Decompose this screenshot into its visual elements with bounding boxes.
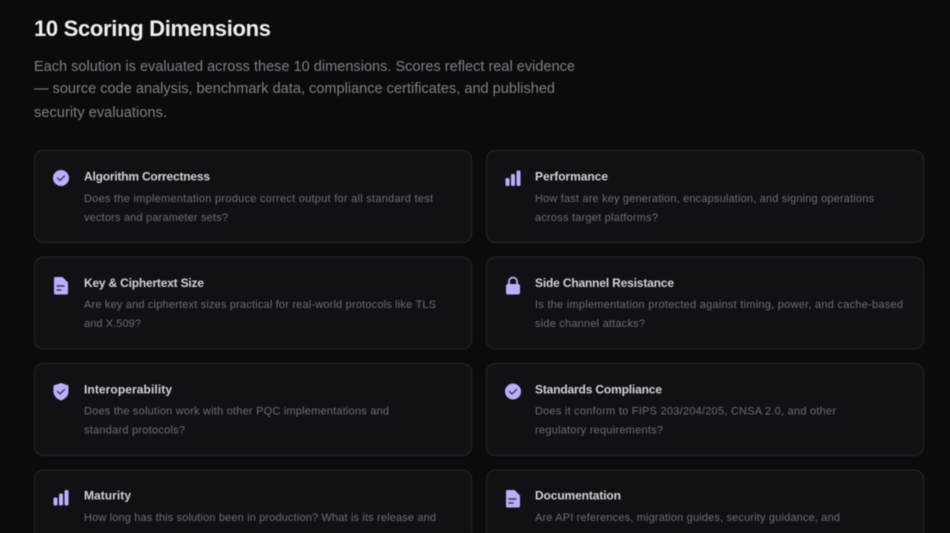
intro paragraph: Each solution is evaluated across these 10 dimensions. Scores reflect real evidence xyxy=(34,59,575,75)
icon: shield check xyxy=(54,383,68,400)
card text: Performance: Performance xyxy=(535,170,608,184)
icon: check badge xyxy=(53,170,69,186)
panel: Side Channel Resistance xyxy=(486,257,924,349)
card text: Algorithm Correctness: Does the implementation produce correct output for all standard test xyxy=(84,193,433,205)
panel: Key & Ciphertext Size xyxy=(34,257,472,349)
card text: Documentation: Documentation xyxy=(535,488,621,502)
card text: Algorithm Correctness: Algorithm Correctness xyxy=(84,170,210,184)
card text: Performance xyxy=(535,170,874,224)
card text: Maturity xyxy=(84,488,436,533)
icon: bars xyxy=(506,170,520,186)
card text: Interoperability: Interoperability xyxy=(84,382,172,396)
card text: Key & Ciphertext Size: Are key and ciphertext sizes practical for real-world protocols like TLS xyxy=(84,299,436,311)
card text: Side Channel Resistance: Side Channel Resistance xyxy=(535,276,674,290)
card text: Key & Ciphertext Size: and X.509? xyxy=(84,318,141,330)
card text: Side Channel Resistance: Is the implementation protected against timing, power, and cache-based xyxy=(535,299,903,311)
icon: lock xyxy=(506,278,520,294)
panel: Performance xyxy=(486,150,924,242)
title: 10 Scoring Dimensions xyxy=(34,16,271,41)
card text: Documentation: Are API references, migration guides, security guidance, and xyxy=(535,512,840,524)
card text: Side Channel Resistance: side channel attacks? xyxy=(535,318,645,330)
card text: Maturity: Maturity xyxy=(84,488,131,502)
panel: Maturity xyxy=(34,470,472,533)
card text: Performance: How fast are key generation, encapsulation, and signing operations xyxy=(535,193,874,205)
card text: Interoperability xyxy=(84,382,389,436)
card text: Interoperability: Does the solution work with other PQC implementations and xyxy=(84,406,389,418)
icon: document xyxy=(506,490,520,508)
intro paragraph: — source code analysis, benchmark data, compliance certificates, and published xyxy=(34,81,555,97)
card text: Performance: across target platforms? xyxy=(535,212,658,224)
intro paragraph xyxy=(34,59,575,121)
card text: Algorithm Correctness xyxy=(84,170,433,224)
panel: Interoperability xyxy=(34,364,472,456)
card text: Interoperability: standard protocols? xyxy=(84,424,185,436)
card text: Key & Ciphertext Size xyxy=(84,276,436,330)
card text: Standards Compliance xyxy=(535,382,836,436)
icon: check badge xyxy=(505,384,521,400)
panel: Algorithm Correctness xyxy=(34,150,472,242)
card text: Maturity: How long has this solution been in production? What is its release and xyxy=(84,512,436,524)
card text: Side Channel Resistance xyxy=(535,276,903,330)
card text: Documentation xyxy=(535,488,840,533)
card text: Standards Compliance: Does it conform to FIPS 203/204/205, CNSA 2.0, and other xyxy=(535,406,836,418)
card text: Standards Compliance: regulatory requirements? xyxy=(535,424,663,436)
icon: bars xyxy=(54,490,68,506)
panel: Standards Compliance xyxy=(486,364,924,456)
card text: Key & Ciphertext Size: Key & Ciphertext Size xyxy=(84,276,204,290)
intro paragraph: security evaluations. xyxy=(34,105,167,121)
panel: Documentation xyxy=(486,470,924,533)
icon: document xyxy=(54,277,68,294)
card text: Algorithm Correctness: vectors and parameter sets? xyxy=(84,212,228,224)
card text: Standards Compliance: Standards Compliance xyxy=(535,382,662,396)
